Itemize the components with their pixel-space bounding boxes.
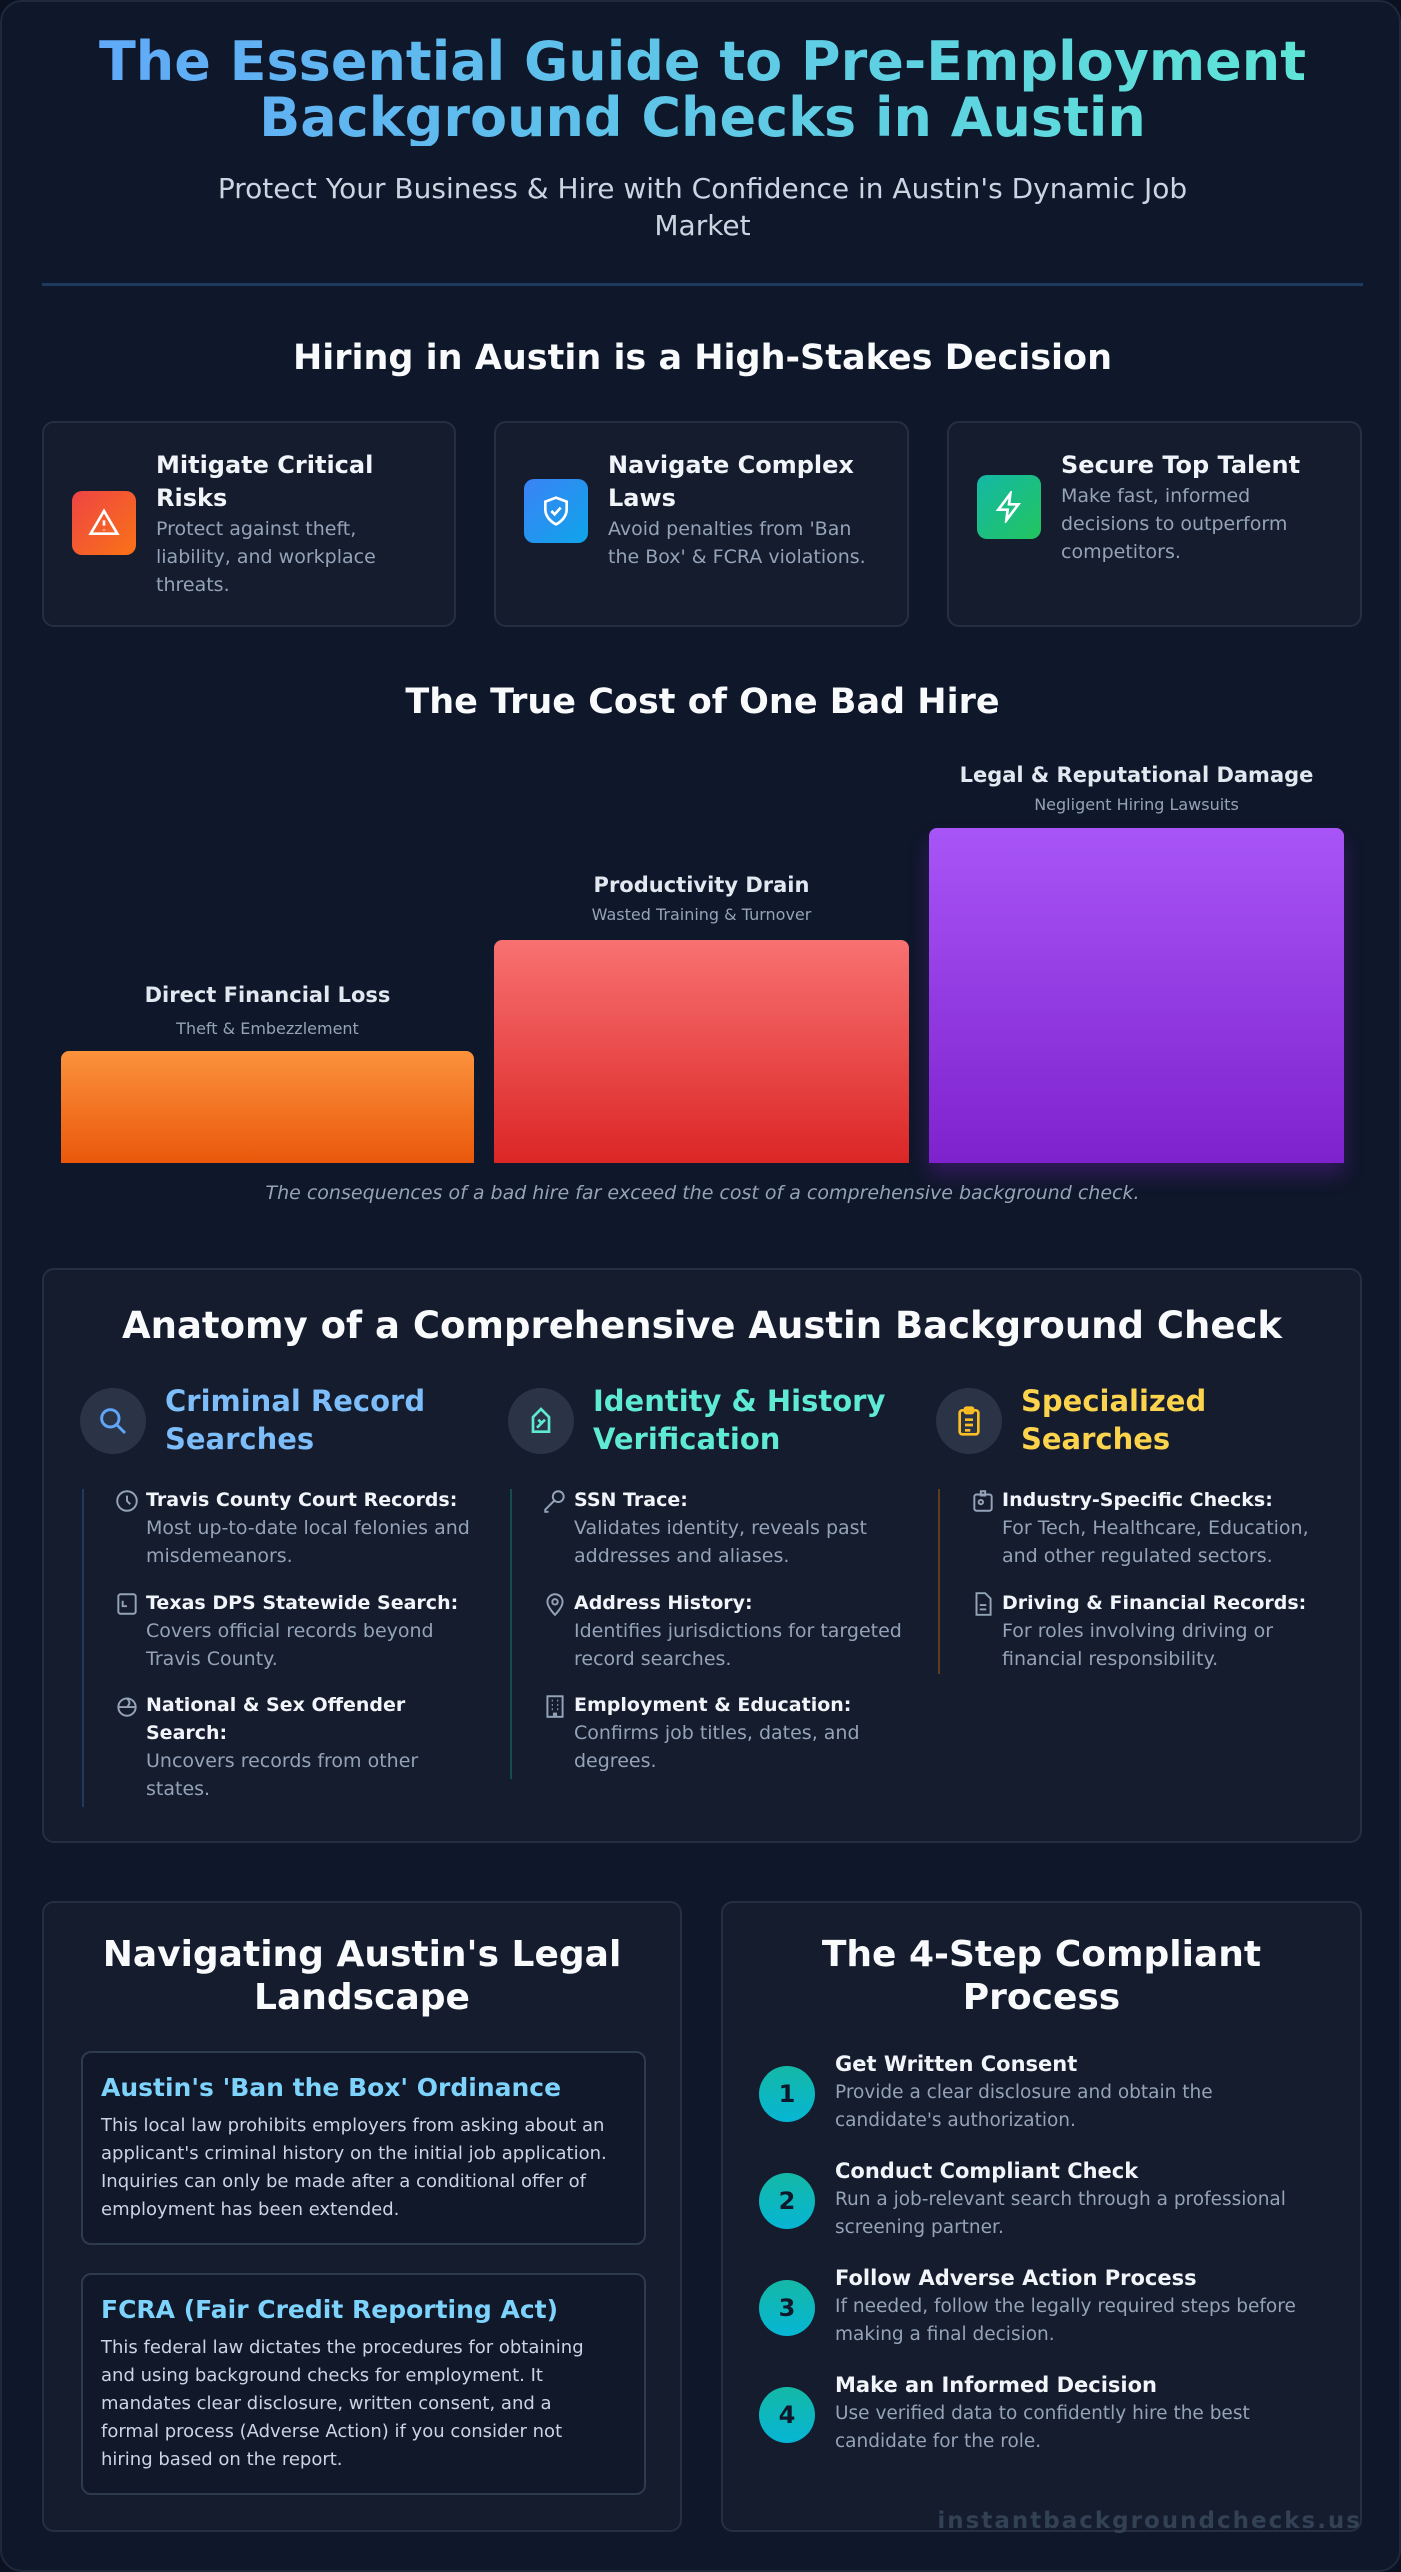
box: ban the box xyxy=(81,2051,646,2245)
text: Protect against theft, liability, and workplace threats. xyxy=(156,518,376,596)
step 3 xyxy=(759,2266,1296,2345)
card: secure talent xyxy=(947,421,1362,627)
card: mitigate risks xyxy=(42,421,456,627)
icon: warning xyxy=(72,491,136,555)
step 4: Make an Informed Decision xyxy=(835,2373,1157,2397)
text: Make fast, informed decisions to outperform competitors. xyxy=(1061,485,1287,563)
bar: direct financial loss: Direct Financial Loss xyxy=(145,983,390,1007)
item: Texas DPS Statewide Search: xyxy=(146,1592,458,1614)
box: ban the box: This local law prohibits employers from asking about an applicant's criminal history on the initial job application. Inquiries can only be made after a conditional offer of employment has been extended. xyxy=(101,2115,607,2220)
text xyxy=(156,451,376,596)
bar: productivity drain: Wasted Training & Turnover xyxy=(592,905,811,924)
heading: true cost: The True Cost of One Bad Hire xyxy=(405,682,1000,722)
item: Validates identity, reveals past addresses and aliases. xyxy=(574,1517,867,1567)
item: Industry-Specific Checks: xyxy=(1002,1489,1273,1511)
step 1 xyxy=(759,2052,1213,2131)
text: Avoid penalties from 'Ban the Box' & FCRA violations. xyxy=(608,518,866,568)
item: National & Sex Offender Search: xyxy=(146,1694,405,1744)
text: Mitigate Critical Risks xyxy=(156,451,373,512)
column: specialized xyxy=(936,1384,1309,1674)
column: specialized: Specialized xyxy=(1021,1384,1206,1418)
text: Secure Top Talent xyxy=(1061,451,1300,479)
item: For roles involving driving or financial responsibility. xyxy=(1002,1620,1273,1670)
box: FCRA: FCRA (Fair Credit Reporting Act) xyxy=(101,2295,558,2324)
heading: Navigating Austin's Legal xyxy=(103,1934,621,1975)
step 1: Provide a clear disclosure and obtain the candidate's authorization. xyxy=(835,2082,1213,2131)
step 4: Use verified data to confidently hire the best candidate for the role. xyxy=(835,2403,1250,2452)
step 3: If needed, follow the legally required steps before making a final decision. xyxy=(835,2296,1296,2345)
bar: legal damage: Negligent Hiring Lawsuits xyxy=(1034,795,1239,814)
column: identity xyxy=(508,1384,902,1779)
column: identity: Identity & History xyxy=(593,1384,885,1418)
step 1: Get Written Consent xyxy=(835,2052,1077,2076)
heading xyxy=(103,1934,621,2018)
caption: The consequences of a bad hire far exceed the cost of a comprehensive background check. xyxy=(265,1182,1140,1204)
column: criminal: Searches xyxy=(165,1422,314,1456)
item xyxy=(116,1489,470,1567)
item: For Tech, Healthcare, Education, and other regulated sectors. xyxy=(1002,1517,1309,1567)
title: The Essential Guide to Pre-Employment xyxy=(99,30,1306,93)
step 3: Follow Adverse Action Process xyxy=(835,2266,1197,2290)
watermark: instantbackgroundchecks.us xyxy=(937,2508,1362,2534)
step 2 xyxy=(759,2159,1286,2238)
step 2: Run a job-relevant search through a professional screening partner. xyxy=(835,2189,1286,2238)
icon: fingerprint xyxy=(508,1388,574,1454)
bar: productivity drain: Productivity Drain xyxy=(594,873,809,897)
item: Most up-to-date local felonies and misdemeanors. xyxy=(146,1517,470,1567)
bar: direct financial loss: Theft & Embezzlement xyxy=(176,1019,359,1038)
panel: 4-step process xyxy=(721,1901,1362,2532)
text: 1 xyxy=(779,2080,795,2108)
subtitle: Protect Your Business & Hire with Confidence in Austin's Dynamic Job Market xyxy=(218,172,1187,242)
text: 4 xyxy=(779,2401,795,2429)
panel: legal landscape xyxy=(42,1901,682,2532)
heading: Anatomy of a Comprehensive Austin Background Check xyxy=(122,1304,1282,1347)
item: Uncovers records from other states. xyxy=(146,1750,418,1800)
item: Identifies jurisdictions for targeted record searches. xyxy=(574,1620,902,1670)
column: identity: Verification xyxy=(593,1422,780,1456)
text: 2 xyxy=(779,2187,795,2215)
item xyxy=(544,1489,867,1567)
bar: legal damage xyxy=(920,763,1352,1184)
heading: Landscape xyxy=(254,1977,470,2018)
item: Employment & Education: xyxy=(574,1694,851,1716)
bar: productivity drain xyxy=(494,873,909,1163)
column: criminal: Criminal Record xyxy=(165,1384,425,1418)
box: FCRA: This federal law dictates the procedures for obtaining and using background checks for employment. It mandates clear disclosure, written consent, and a formal process (Adverse Action) if you consider not hiring based on the report. xyxy=(101,2337,584,2470)
bar: legal damage: Legal & Reputational Damage xyxy=(960,763,1313,787)
item xyxy=(973,1489,1309,1567)
icon: clipboard xyxy=(936,1388,1002,1454)
box: FCRA xyxy=(81,2273,646,2495)
item xyxy=(117,1592,458,1670)
column: specialized: Searches xyxy=(1021,1422,1170,1456)
item: Address History: xyxy=(574,1592,753,1614)
icon: search xyxy=(80,1388,146,1454)
heading: Process xyxy=(963,1977,1120,2018)
icon: shield xyxy=(524,479,588,543)
icon: lightning xyxy=(977,475,1041,539)
text: Navigate Complex Laws xyxy=(608,451,854,512)
text: 3 xyxy=(779,2294,795,2322)
item: Travis County Court Records: xyxy=(146,1489,457,1511)
bar chart xyxy=(61,763,1352,1184)
title: Background Checks in Austin xyxy=(259,86,1146,149)
item: Driving & Financial Records: xyxy=(1002,1592,1306,1614)
item xyxy=(117,1694,418,1800)
column: criminal xyxy=(80,1384,470,1807)
step 2: Conduct Compliant Check xyxy=(835,2159,1138,2183)
item: Covers official records beyond Travis County. xyxy=(146,1620,434,1670)
step 4 xyxy=(759,2373,1250,2452)
text xyxy=(1061,451,1300,563)
bar: direct financial loss xyxy=(61,983,474,1163)
panel: anatomy xyxy=(42,1268,1362,1843)
item xyxy=(976,1592,1306,1670)
item xyxy=(546,1694,860,1772)
item: Confirms job titles, dates, and degrees. xyxy=(574,1722,860,1772)
box: ban the box: Austin's 'Ban the Box' Ordinance xyxy=(101,2073,561,2102)
item xyxy=(546,1592,902,1670)
text xyxy=(608,451,866,568)
heading: high stakes: Hiring in Austin is a High-Stakes Decision xyxy=(293,338,1112,378)
heading: The 4-Step Compliant xyxy=(822,1934,1261,1975)
heading xyxy=(822,1934,1261,2018)
title xyxy=(2,34,1401,146)
item: SSN Trace: xyxy=(574,1489,688,1511)
card: navigate laws xyxy=(494,421,909,627)
